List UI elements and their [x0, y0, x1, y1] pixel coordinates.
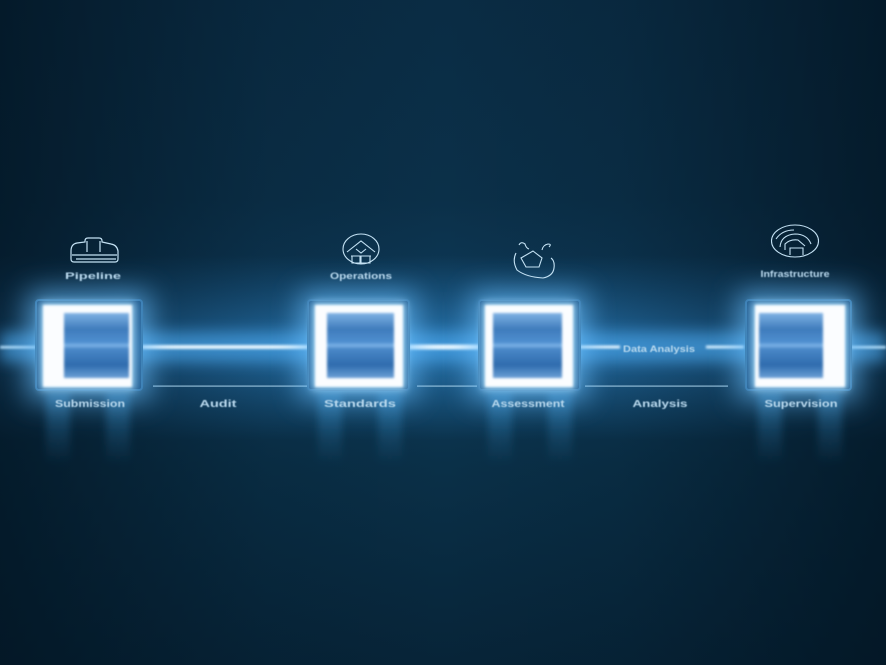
label: bottom 1: Submission	[55, 399, 125, 410]
label: bottom 4: Supervision	[764, 399, 838, 410]
connector: lower thin lines	[153, 386, 728, 387]
label: bottom between 1 and 2: Audit	[200, 399, 237, 410]
icon: network ring	[514, 243, 554, 278]
label: top 1: Pipeline	[65, 271, 121, 282]
label: top 4: Infrastructure	[760, 269, 830, 280]
step box 3	[471, 292, 587, 400]
label: bottom 2: Standards	[324, 399, 397, 410]
label: bottom 3: Assessment	[492, 399, 565, 410]
icon: device	[71, 238, 118, 262]
icon: layered dome in circle	[772, 225, 818, 257]
label: top 2: Operations	[330, 271, 392, 282]
box reflections	[46, 392, 842, 464]
step box 2	[300, 292, 416, 400]
label: bottom between 3 and 4: Analysis	[632, 399, 688, 410]
connector: main light beam	[0, 332, 886, 362]
step box 4	[738, 292, 858, 400]
label: on beam: Data Analysis	[623, 344, 695, 355]
icon: house in circle	[343, 234, 379, 264]
step box 1	[28, 292, 150, 400]
